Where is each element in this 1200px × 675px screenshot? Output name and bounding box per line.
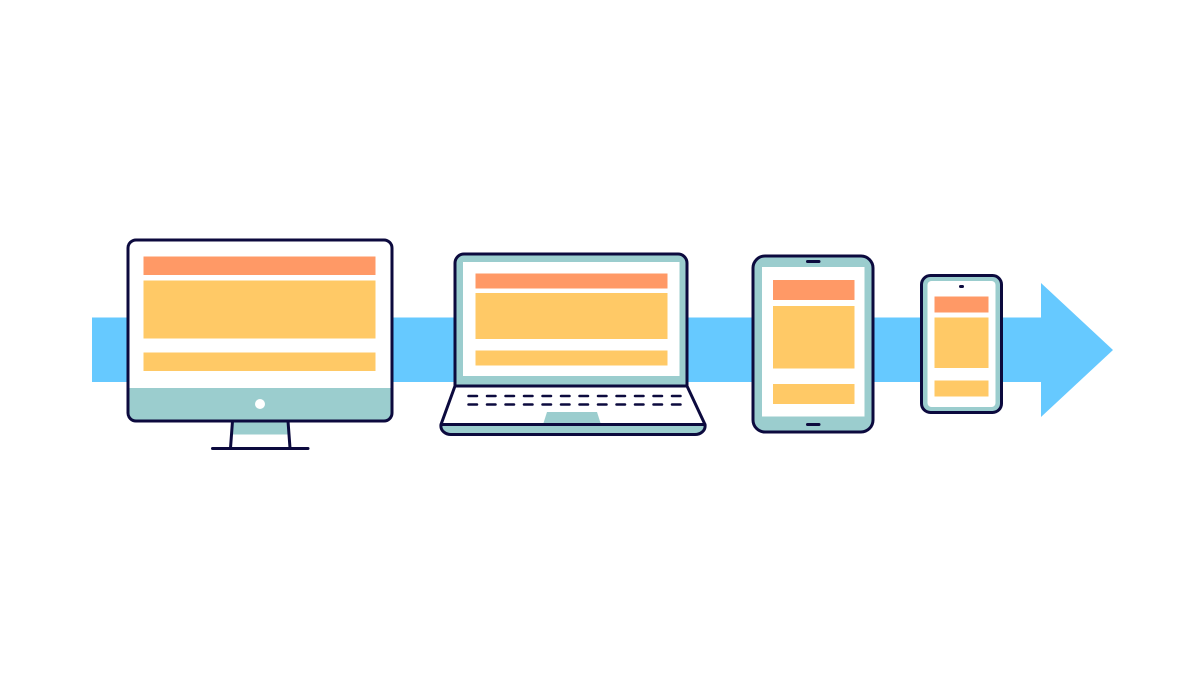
phone camera	[959, 285, 964, 288]
desktop main block	[144, 280, 376, 338]
tablet header block	[773, 280, 854, 300]
laptop base	[441, 424, 705, 434]
phone footer block	[934, 380, 988, 396]
monitor chin	[128, 388, 392, 421]
phone screen	[928, 281, 996, 407]
phone header block	[934, 296, 988, 312]
tablet footer block	[773, 384, 854, 404]
tablet top speaker	[808, 260, 819, 263]
laptop header block	[476, 274, 668, 288]
arrow	[92, 283, 1113, 417]
laptop keys	[468, 396, 680, 404]
tablet screen	[762, 267, 864, 416]
desktop header block	[144, 256, 376, 275]
tablet home bar	[808, 423, 819, 426]
laptop keyboard deck	[441, 386, 705, 424]
monitor outline	[128, 240, 392, 421]
device: laptop	[441, 254, 705, 434]
device: desktop monitor	[128, 240, 392, 448]
tablet main block	[773, 306, 854, 368]
device: phone	[922, 276, 1002, 412]
power button	[255, 399, 265, 409]
laptop footer block	[476, 350, 668, 366]
monitor body	[128, 240, 392, 421]
laptop main block	[476, 293, 668, 339]
tablet body	[753, 256, 873, 432]
desktop footer block	[144, 352, 376, 371]
device: tablet	[753, 256, 873, 432]
monitor stand	[212, 421, 308, 448]
phone main block	[934, 318, 988, 368]
laptop trackpad	[544, 412, 600, 423]
phone body	[922, 276, 1002, 412]
laptop screen	[463, 262, 680, 376]
laptop lid	[455, 254, 687, 386]
